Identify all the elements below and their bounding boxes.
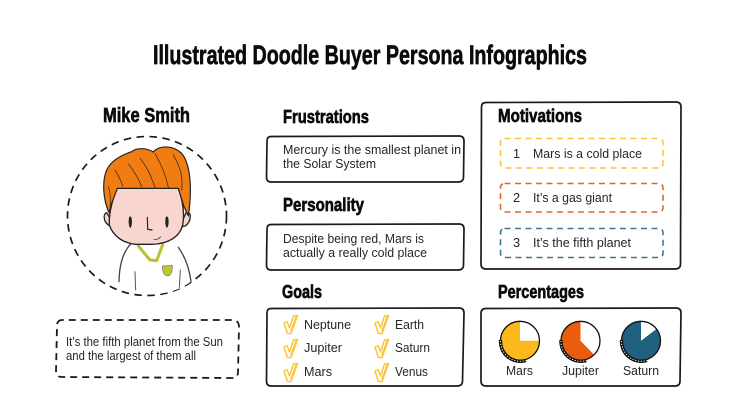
icon: check [284,316,298,334]
goal label: Venus [395,364,428,379]
motivation 3 [500,228,663,258]
text box: frustrations [266,136,464,182]
motivation 1 [500,138,663,168]
goal label: Mars [304,364,332,379]
icon: check [375,316,388,334]
heading: personality: Personality [283,195,364,215]
heading: goals: Goals [282,282,322,302]
avatar ring [68,136,226,296]
panel: motivations [481,102,681,269]
icon: check [375,364,388,382]
goal label: Neptune [304,317,351,332]
text box: frustrations: Mercury is the smallest planet in [283,142,461,157]
heading: percentages: Percentages [498,282,584,302]
icon: character portrait [104,147,191,295]
callout: persona description [56,320,239,378]
callout: persona description: It’s the fifth planet from the Sun [66,334,223,349]
panel: persona [56,105,239,378]
motivation 3: 3 [513,235,520,250]
panel: frustrations [266,107,464,182]
motivation 2: 2 [513,190,520,205]
label: Jupiter [562,363,600,378]
panel: percentages [481,282,681,386]
goal label: Jupiter [304,340,343,355]
icon: check [375,340,388,358]
text box: personality: Despite being red, Mars is [283,231,424,246]
chart: Jupiter pie [561,321,600,378]
label: Mars [506,363,533,378]
title: Illustrated Doodle Buyer Persona Infographics [153,40,587,70]
heading: frustrations: Frustrations [283,107,369,127]
goal label: Saturn [395,340,430,355]
chart: Mars pie [500,321,540,378]
chart: Saturn pie [621,321,660,378]
motivation 1: Mars is a cold place [533,146,642,161]
label: Saturn [623,363,659,378]
motivation 2 [500,184,663,212]
motivation 3: It’s the fifth planet [533,235,631,250]
goal label: Earth [395,317,424,332]
motivation 1: 1 [513,146,520,161]
icon: check [284,340,298,358]
motivations box [481,102,681,269]
text box: frustrations: the Solar System [283,156,376,171]
icon: check [284,364,298,382]
percentages box [481,308,681,386]
callout: persona description: and the largest of them all [66,348,196,363]
goals box [266,308,464,386]
panel: goals [266,282,464,386]
text box: personality [266,224,464,270]
heading: motivations: Motivations [498,106,582,126]
motivation 2: It’s a gas giant [533,190,612,205]
heading: persona name: Mike Smith [103,105,190,127]
text box: personality: actually a really cold place [283,245,427,260]
panel: personality [266,195,464,270]
